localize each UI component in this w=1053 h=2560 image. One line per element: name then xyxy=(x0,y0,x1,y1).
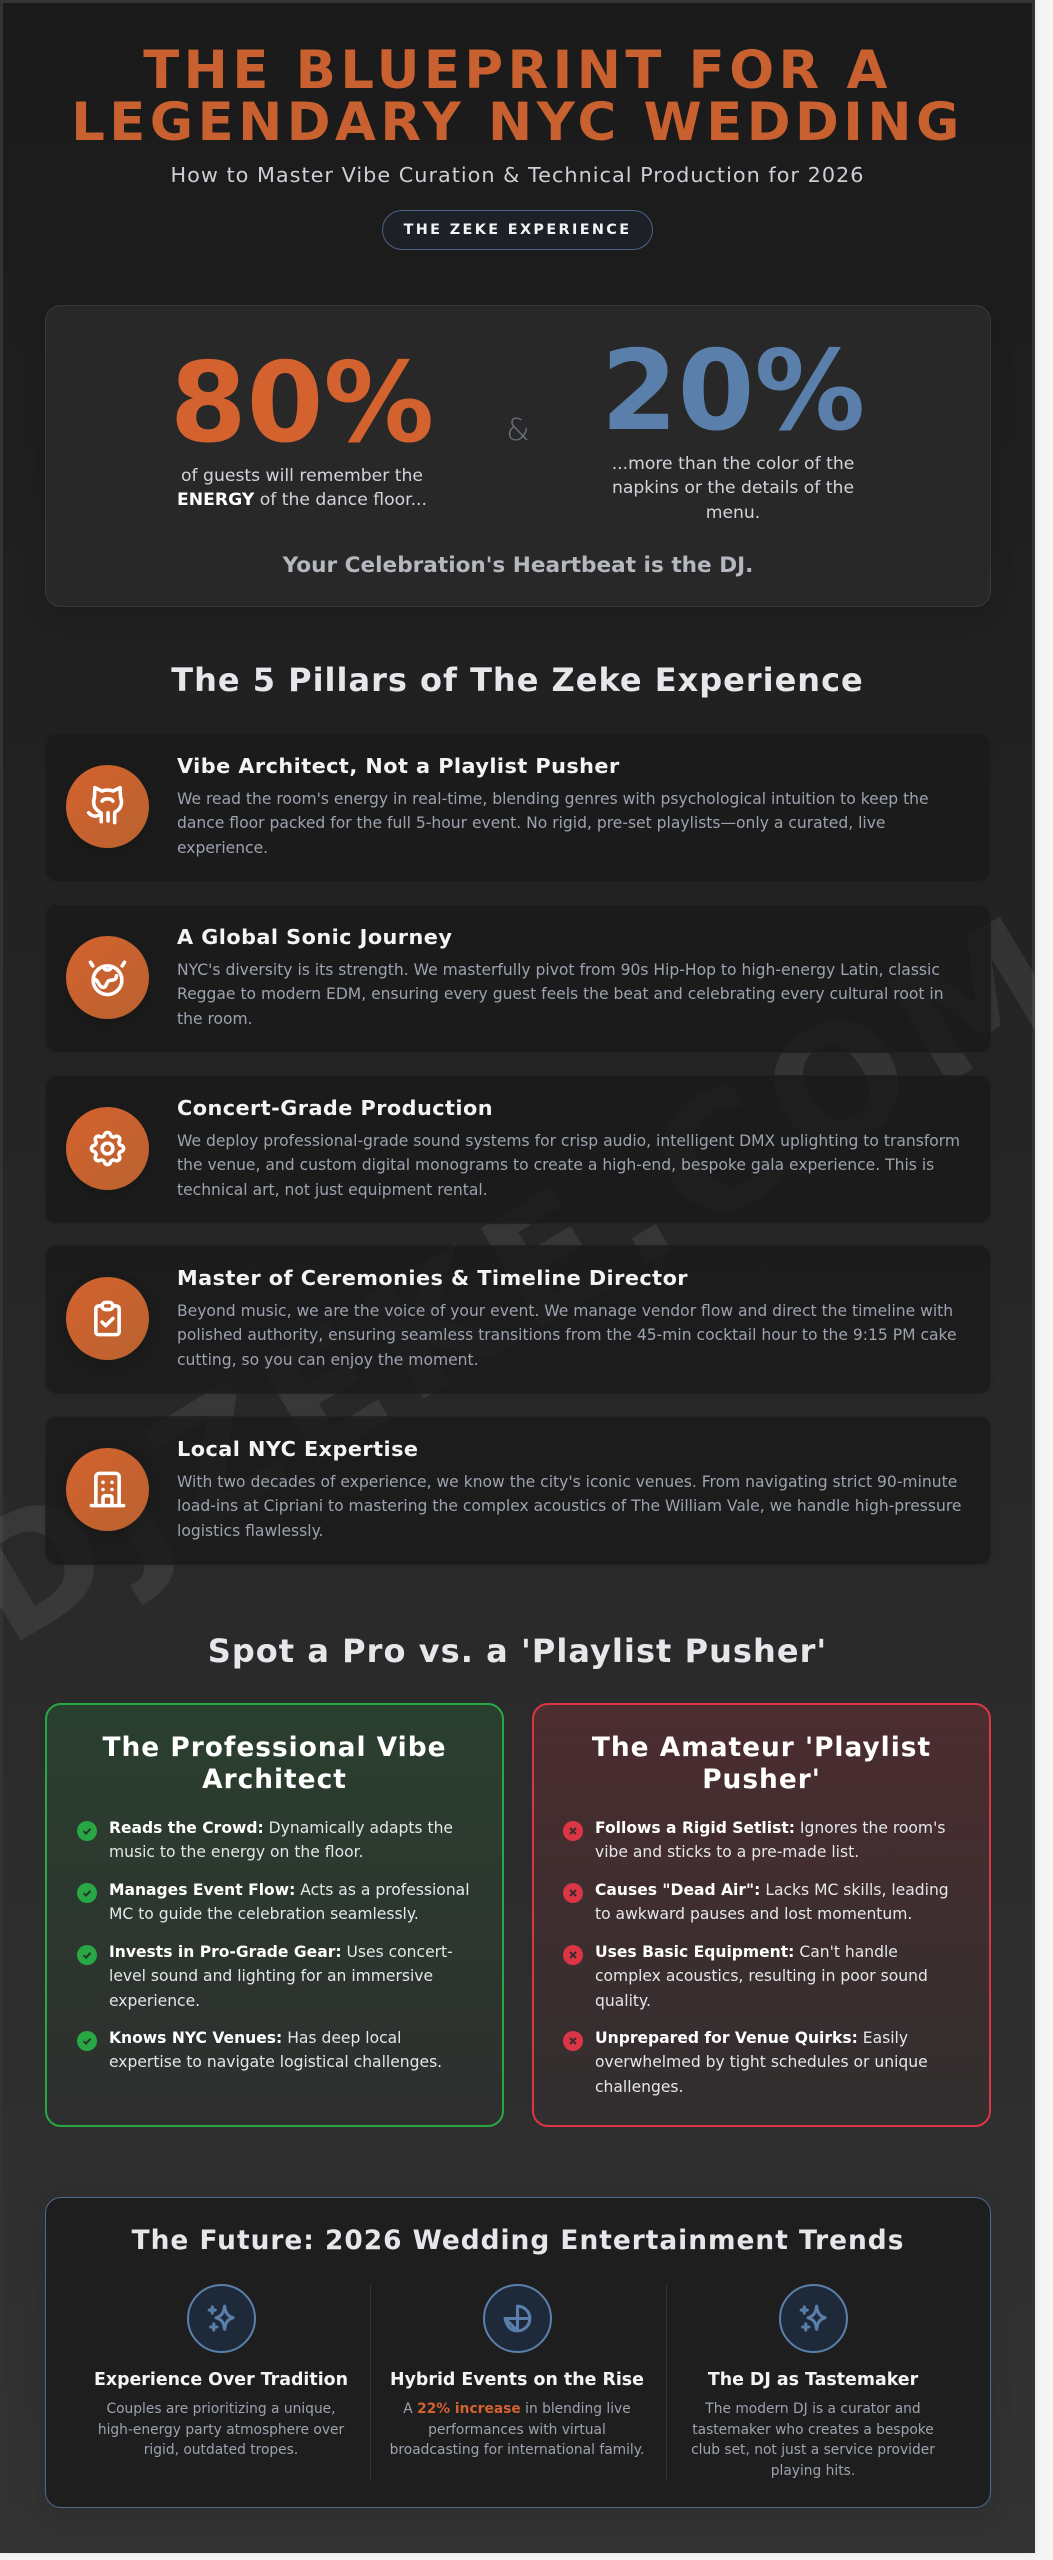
panel heading: Architect xyxy=(202,1764,347,1795)
pillar text: Beyond music, we are the voice of your event. We manage vendor flow and direct the timeline with xyxy=(177,1302,953,1320)
panel: future trends xyxy=(45,2197,991,2508)
trend text xyxy=(98,2401,344,2458)
item 3 xyxy=(563,1943,928,2010)
panel: pillar 4 xyxy=(45,1245,991,1394)
title: THE BLUEPRINT FOR A xyxy=(143,40,892,101)
icon: check xyxy=(77,2031,97,2051)
panel: pillar 5 xyxy=(45,1416,991,1565)
item text xyxy=(595,2029,928,2096)
icon: check xyxy=(77,1883,97,1903)
panel heading: The Professional Vibe xyxy=(103,1732,446,1763)
trend text xyxy=(691,2401,935,2479)
trend text: A 22% increase in blending live xyxy=(403,2401,631,2417)
item text xyxy=(109,1819,453,1861)
item text: challenges. xyxy=(595,2078,683,2096)
pillar text: We deploy professional-grade sound systems for crisp audio, intelligent DMX uplighting to transform xyxy=(177,1132,960,1150)
item 1 xyxy=(77,1819,453,1861)
pillar text xyxy=(177,1132,960,1199)
item 4 xyxy=(563,2029,928,2096)
item text: Manages Event Flow: Acts as a professional xyxy=(109,1881,470,1899)
pillar text: Reggae to modern EDM, ensuring every guest feels the beat and celebrating every cultural root in xyxy=(177,985,944,1003)
pillar text: technical art, not just equipment rental. xyxy=(177,1181,488,1199)
stat: 80% caption xyxy=(177,466,427,510)
pillar title: Concert-Grade Production xyxy=(177,1096,493,1120)
panel: stats xyxy=(45,305,991,607)
icon: cross xyxy=(563,2031,583,2051)
pillar title: A Global Sonic Journey xyxy=(177,925,452,949)
item text: quality. xyxy=(595,1992,651,2010)
pillar text: experience. xyxy=(177,839,268,857)
item text: expertise to navigate logistical challenges. xyxy=(109,2053,442,2071)
item text xyxy=(595,1881,949,1923)
item text: Unprepared for Venue Quirks: Easily xyxy=(595,2029,908,2047)
item text: complex acoustics, resulting in poor sound xyxy=(595,1967,928,1985)
title: LEGENDARY NYC WEDDING xyxy=(71,92,964,153)
item 2 xyxy=(77,1881,470,1923)
item text: Follows a Rigid Setlist: Ignores the room's xyxy=(595,1819,945,1837)
item 1 xyxy=(563,1819,945,1861)
panel: amateur xyxy=(532,1703,991,2127)
stat: 20% caption: ...more than the color of the xyxy=(612,454,854,474)
pillar text: polished authority, ensuring seamless transitions from the 45-min cocktail hour to the 9:15 PM cake xyxy=(177,1326,957,1344)
trend text: broadcasting for international family. xyxy=(390,2442,644,2458)
pillar text: dance floor packed for the full 5-hour event. No rigid, pre-set playlists—only a curated, live xyxy=(177,814,885,832)
stat: 80% caption: ENERGY of the dance floor... xyxy=(177,490,427,510)
pillar text: With two decades of experience, we know the city's iconic venues. From navigating strict 90-minute xyxy=(177,1473,957,1491)
icon: cross xyxy=(563,1883,583,1903)
trend column 1 xyxy=(94,2284,348,2458)
panel heading xyxy=(102,1732,446,1795)
icon: building xyxy=(66,1448,149,1531)
item 4 xyxy=(77,2029,442,2071)
icon: check xyxy=(77,1821,97,1841)
item text: Knows NYC Venues: Has deep local xyxy=(109,2029,402,2047)
pillar text: logistics flawlessly. xyxy=(177,1522,324,1540)
item text xyxy=(109,2029,442,2071)
stat: 20% caption: napkins or the details of the xyxy=(612,478,854,498)
item text: MC to guide the celebration seamlessly. xyxy=(109,1905,419,1923)
item text: vibe and sticks to a pre-made list. xyxy=(595,1843,859,1861)
icon: sparkles xyxy=(187,2284,256,2353)
trend title: Experience Over Tradition xyxy=(94,2370,348,2390)
trend text: high-energy party atmosphere over xyxy=(98,2422,344,2438)
pillar text xyxy=(177,961,944,1028)
item text: experience. xyxy=(109,1992,200,2010)
trend title: Hybrid Events on the Rise xyxy=(390,2370,644,2390)
pillar text: load-ins at Cipriani to mastering the complex acoustics of The William Vale, we handle high-pressure xyxy=(177,1497,961,1515)
trend text: tastemaker who creates a bespoke xyxy=(692,2422,934,2438)
stat: 20% caption xyxy=(612,454,854,523)
tagline: Your Celebration's Heartbeat is the DJ. xyxy=(283,553,753,578)
item text: Uses Basic Equipment: Can't handle xyxy=(595,1943,898,1961)
item text: Causes "Dead Air": Lacks MC skills, leading xyxy=(595,1881,949,1899)
stat: 80% caption: of guests will remember the xyxy=(181,466,423,486)
pillar text xyxy=(177,790,929,857)
icon: gear xyxy=(66,1107,149,1190)
panel heading: Pusher' xyxy=(702,1764,821,1795)
pillar text: the venue, and custom digital monograms to create a high-end, bespoke gala experience. This is xyxy=(177,1156,934,1174)
item text xyxy=(109,1881,470,1923)
trend text: club set, not just a service provider xyxy=(691,2442,935,2458)
pillar text: the room. xyxy=(177,1010,253,1028)
ampersand: & xyxy=(506,413,530,448)
icon: check xyxy=(77,1945,97,1965)
item text: to awkward pauses and lost momentum. xyxy=(595,1905,912,1923)
trend column 2 xyxy=(390,2284,644,2458)
trend text: performances with virtual xyxy=(428,2422,606,2438)
item text xyxy=(595,1943,928,2010)
pillar text: We read the room's energy in real-time, blending genres with psychological intuition to keep the xyxy=(177,790,929,808)
pillar text xyxy=(177,1473,961,1540)
pillar text: cutting, so you can enjoy the moment. xyxy=(177,1351,479,1369)
item text xyxy=(109,1943,453,2010)
heading: pillars: The 5 Pillars of The Zeke Experience xyxy=(171,661,864,699)
panel heading: The Future: 2026 Wedding Entertainment Trends xyxy=(132,2225,904,2256)
pillar title: Vibe Architect, Not a Playlist Pusher xyxy=(177,754,620,778)
icon: smiling globe xyxy=(66,936,149,1019)
panel: pillar 2 xyxy=(45,904,991,1053)
panel: pillar 1 xyxy=(45,733,991,882)
stat: 20% caption: menu. xyxy=(706,503,760,523)
trend text: The modern DJ is a curator and xyxy=(705,2401,921,2417)
pillar text: NYC's diversity is its strength. We masterfully pivot from 90s Hip-Hop to high-energy Latin, classic xyxy=(177,961,940,979)
stat: 20%: 20% xyxy=(601,328,865,456)
item text: Invests in Pro-Grade Gear: Uses concert- xyxy=(109,1943,453,1961)
item text xyxy=(595,1819,945,1861)
pillar title: Master of Ceremonies & Timeline Director xyxy=(177,1266,688,1290)
icon: cross xyxy=(563,1945,583,1965)
trend text: Couples are prioritizing a unique, xyxy=(106,2401,336,2417)
item 3 xyxy=(77,1943,453,2010)
heading: comparison: Spot a Pro vs. a 'Playlist Pusher' xyxy=(208,1632,827,1670)
item text: overwhelmed by tight schedules or unique xyxy=(595,2053,928,2071)
icon: clipboard check xyxy=(66,1277,149,1360)
subtitle: How to Master Vibe Curation & Technical Production for 2026 xyxy=(170,163,865,187)
stat: 80%: 80% xyxy=(170,340,434,468)
trend title: The DJ as Tastemaker xyxy=(708,2370,918,2390)
panel heading xyxy=(592,1732,931,1795)
icon: cross xyxy=(563,1821,583,1841)
trend text: rigid, outdated tropes. xyxy=(144,2442,298,2458)
item text: level sound and lighting for an immersive xyxy=(109,1967,433,1985)
badge: THE ZEKE EXPERIENCE xyxy=(404,222,631,238)
icon: cat mascot xyxy=(66,765,149,848)
trend text xyxy=(390,2401,644,2458)
badge xyxy=(382,210,653,250)
panel: pillar 3 xyxy=(45,1075,991,1224)
pillar title: Local NYC Expertise xyxy=(177,1437,418,1461)
item 2 xyxy=(563,1881,949,1923)
panel: professional xyxy=(45,1703,504,2127)
item text: music to the energy on the floor. xyxy=(109,1843,364,1861)
title xyxy=(71,40,964,153)
panel heading: The Amateur 'Playlist xyxy=(592,1732,931,1763)
item text: Reads the Crowd: Dynamically adapts the xyxy=(109,1819,453,1837)
trend column 3 xyxy=(691,2284,935,2479)
trend text: playing hits. xyxy=(771,2463,855,2479)
icon: pie chart xyxy=(483,2284,552,2353)
pillar text xyxy=(177,1302,957,1369)
icon: sparkles xyxy=(779,2284,848,2353)
